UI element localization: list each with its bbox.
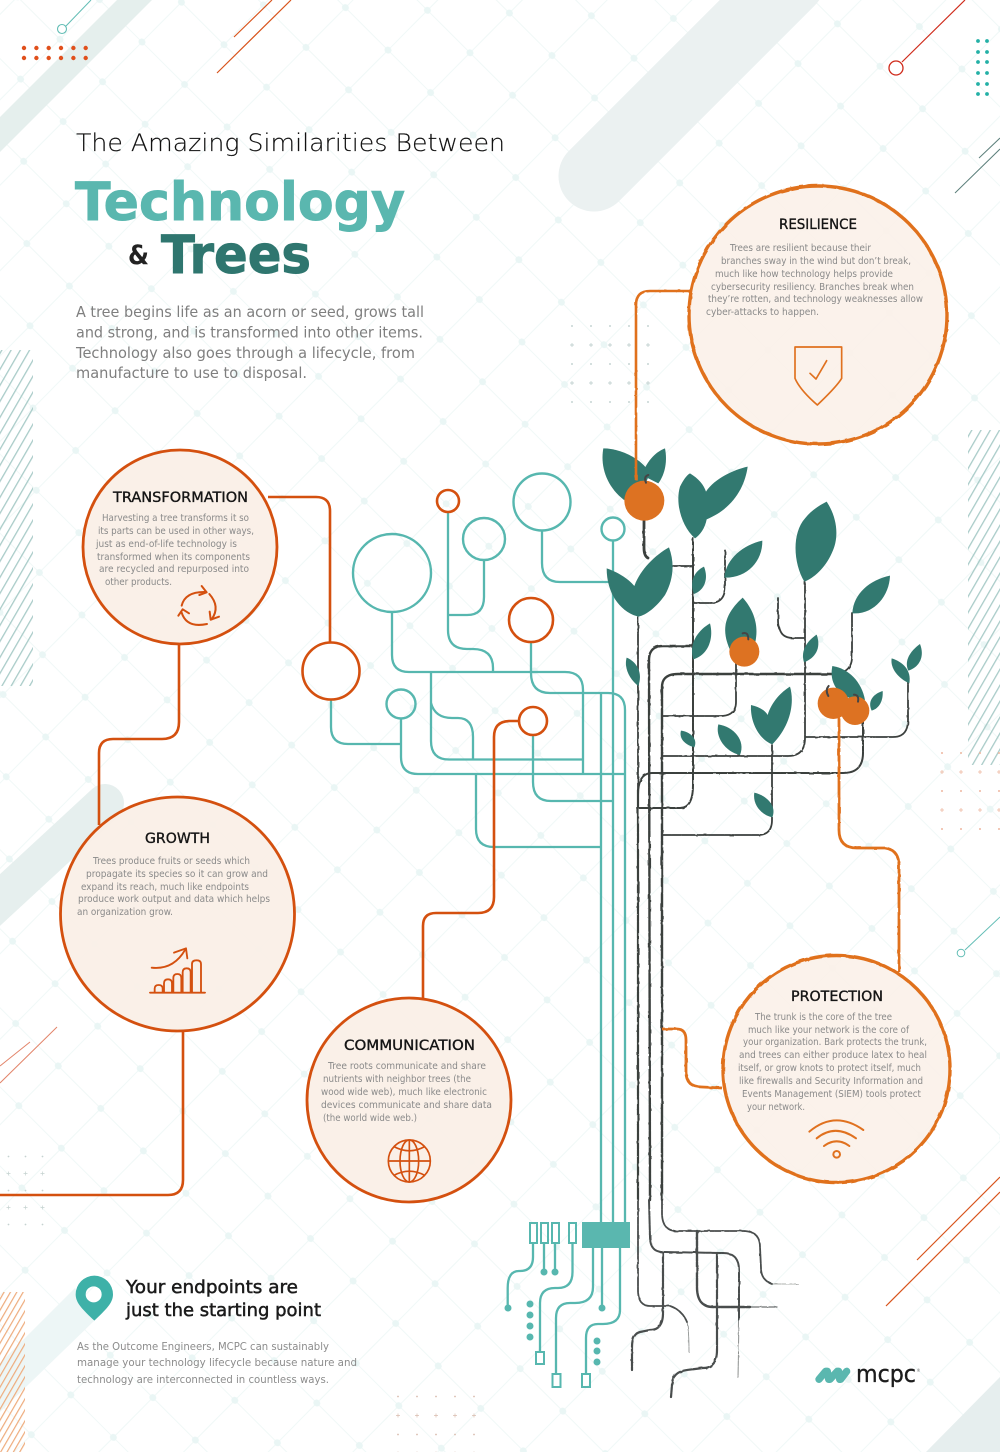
footer heading: just the starting point <box>125 1300 321 1321</box>
body: communication: (the world wide web.) <box>323 1113 417 1124</box>
heading: resilience: RESILIENCE <box>779 217 857 233</box>
body: resilience: Trees are resilient because their <box>729 243 871 254</box>
footer text <box>77 1341 357 1386</box>
body: resilience: branches sway in the wind but don’t break, <box>721 256 911 267</box>
body: transformation: other products. <box>105 577 172 588</box>
body: transformation: just as end-of-life technology is <box>95 539 237 550</box>
icon: globe <box>388 1140 430 1182</box>
footer text: manage your technology lifecycle because nature and <box>77 1357 357 1369</box>
teal circle nodes <box>353 474 624 718</box>
body: transformation: transformed when its components <box>97 552 250 563</box>
circuit legs <box>504 1223 620 1387</box>
orange connectors <box>0 291 899 1195</box>
body: protection: and trees can either produce latex to heal <box>739 1050 927 1061</box>
panel: growth <box>60 797 294 1031</box>
intro text: manufacture to use to disposal. <box>76 364 307 382</box>
footer text: As the Outcome Engineers, MCPC can sustainably <box>77 1341 329 1353</box>
leaves <box>603 448 922 817</box>
body: transformation: are recycled and repurposed into <box>99 564 249 575</box>
footer heading: Your endpoints are <box>125 1277 298 1298</box>
body: growth: propagate its species so it can grow and <box>86 869 268 880</box>
panel: transformation <box>83 450 277 644</box>
body: protection: itself, or grow knots to protect itself, much <box>738 1063 921 1074</box>
orange circle nodes <box>302 490 553 735</box>
body: resilience: they’re rotten, and technology weaknesses allow <box>708 294 923 305</box>
body: protection: Events Management (SIEM) tools protect <box>742 1089 921 1100</box>
body: communication <box>321 1061 492 1124</box>
intro text: Technology also goes through a lifecycle, from <box>75 344 415 362</box>
logo wordmark: mcpc <box>856 1360 916 1388</box>
roots <box>632 1200 798 1397</box>
intro text: and strong, and is transformed into other items. <box>76 324 423 342</box>
icon: location pin <box>76 1276 113 1321</box>
body: transformation: Harvesting a tree transforms it so <box>102 513 249 524</box>
icon: shield <box>795 347 842 405</box>
logo mark <box>819 1371 847 1379</box>
body: protection <box>738 1012 927 1113</box>
fruit <box>624 481 869 725</box>
body: resilience <box>706 243 923 318</box>
heading: ampersand: & <box>128 240 149 271</box>
footer heading <box>125 1277 321 1321</box>
fruit stems <box>645 475 858 702</box>
heading: Trees: Trees <box>161 225 311 286</box>
heading: growth: GROWTH <box>145 831 210 847</box>
logo: mcpc <box>819 1360 920 1388</box>
body: growth: an organization grow. <box>77 907 173 918</box>
footer block <box>76 1276 357 1386</box>
icon: recycle arrows <box>178 586 219 625</box>
intro text: A tree begins life as an acorn or seed, grows tall <box>76 303 424 321</box>
body: communication: devices communicate and share data <box>321 1100 492 1111</box>
icon: wifi <box>809 1120 863 1158</box>
tree leaves and fruit <box>603 448 922 817</box>
body: transformation <box>95 513 254 588</box>
title block <box>75 129 505 286</box>
body: growth: expand its reach, much like endpoints <box>81 882 249 893</box>
body: communication: wood wide web), much like electronic <box>321 1087 487 1098</box>
body: transformation: its parts can be used in other ways, <box>98 526 254 537</box>
heading: transformation: TRANSFORMATION <box>112 490 248 506</box>
panel: protection <box>723 956 950 1182</box>
panel: resilience <box>689 186 947 444</box>
body: protection: your organization. Bark protects the trunk, <box>743 1037 927 1048</box>
technology circuit lines <box>302 474 630 1387</box>
body: communication: nutrients with neighbor trees (the <box>323 1074 471 1085</box>
icon: growth chart <box>150 948 205 993</box>
heading: communication: COMMUNICATION <box>344 1038 475 1054</box>
body: growth: produce work output and data which helps <box>78 894 270 905</box>
body: protection: like firewalls and Security Information and <box>739 1076 923 1087</box>
footer text: technology are interconnected in countless ways. <box>77 1374 329 1386</box>
chip <box>582 1222 630 1248</box>
body: protection: your network. <box>747 1102 805 1113</box>
heading line: The Amazing Similarities Between <box>76 129 505 157</box>
heading: Technology: Technology <box>75 172 405 233</box>
tree branches and roots <box>632 520 908 1397</box>
intro text <box>75 303 424 382</box>
logo registered mark: ® <box>916 1368 920 1373</box>
body: growth: Trees produce fruits or seeds which <box>92 856 250 867</box>
body: resilience: cybersecurity resiliency. Branches break when <box>711 282 914 293</box>
heading: protection: PROTECTION <box>791 989 883 1005</box>
panel: communication <box>307 998 511 1202</box>
body: protection: much like your network is the core of <box>748 1025 910 1036</box>
body: growth <box>77 856 270 918</box>
body: resilience: much like how technology helps provide <box>715 269 893 280</box>
body: communication: Tree roots communicate and share <box>327 1061 486 1072</box>
body: protection: The trunk is the core of the tree <box>754 1012 892 1023</box>
body: resilience: cyber-attacks to happen. <box>706 307 819 318</box>
